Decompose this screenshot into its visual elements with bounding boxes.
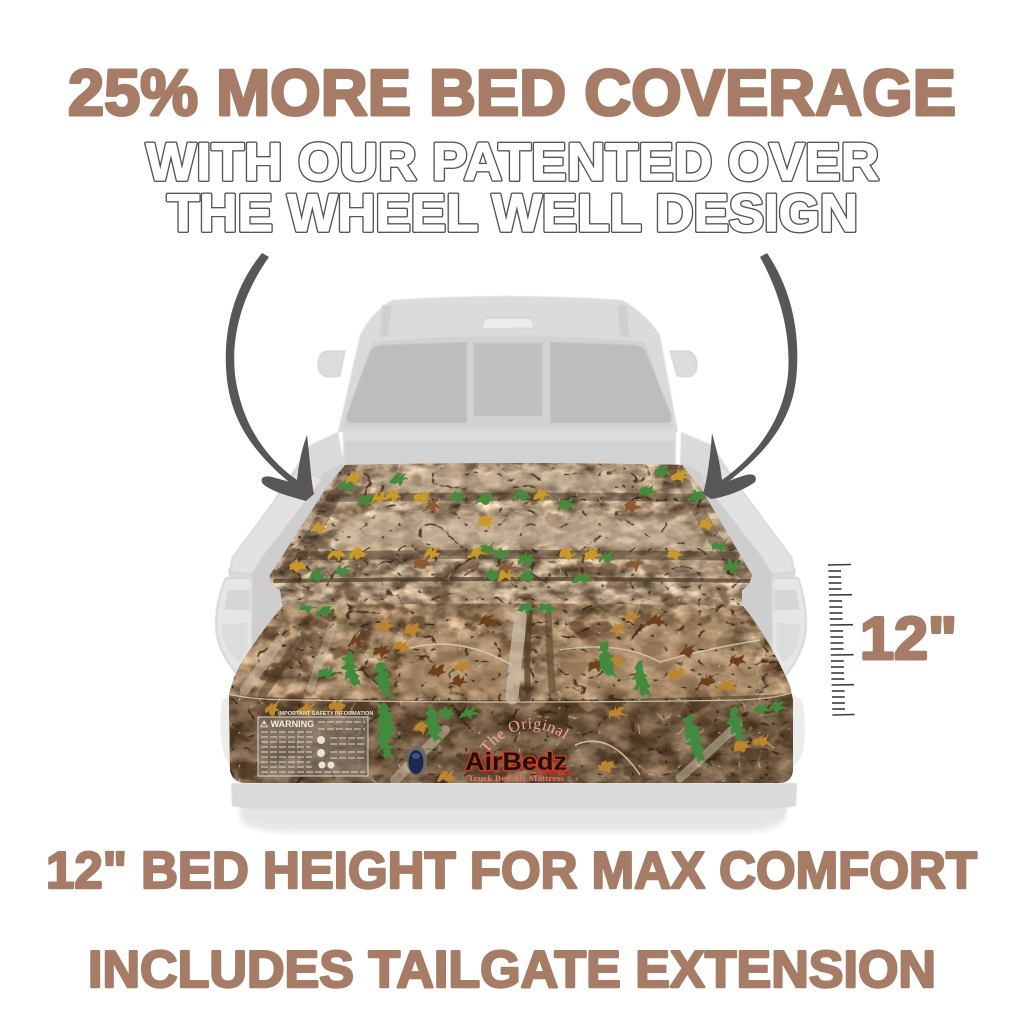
tree trunks <box>245 612 738 780</box>
truck left window <box>347 342 467 423</box>
truck right lower side <box>792 694 805 770</box>
upper leaves <box>288 464 742 585</box>
truck right window <box>550 342 671 423</box>
truck right mirror <box>670 351 697 377</box>
caption: tailgate extension: INCLUDES TAILGATE EXTENSION <box>88 941 936 999</box>
mattress lower section <box>225 600 800 790</box>
subheading: outlined text line one: WITH OUR PATENTED OVER <box>146 133 879 192</box>
mattress <box>229 463 793 783</box>
truck cab <box>338 296 678 432</box>
truck left lower side <box>220 694 232 770</box>
lower leaves <box>263 600 787 784</box>
truck left inner wall <box>252 462 345 650</box>
logo: truck bed air mattress: Truck Bed Air Mattress <box>468 774 564 783</box>
caption: bed height: 12" BED HEIGHT FOR MAX COMFORT <box>46 842 977 900</box>
truck brake light <box>481 318 535 329</box>
truck left bed side <box>228 432 345 660</box>
logo: camo: CAMO <box>536 768 571 777</box>
truck illustration <box>216 296 806 832</box>
truck left mirror <box>318 351 345 377</box>
truck rear bumper <box>231 783 797 809</box>
warning label: IMPORTANT SAFETY INFORMATION <box>278 711 373 717</box>
upper camo texture <box>270 463 752 606</box>
truck left taillight <box>216 578 252 678</box>
truck left rail <box>230 466 322 574</box>
warning label <box>258 711 373 776</box>
truck right bed side <box>680 432 796 660</box>
truck right rail <box>702 466 794 574</box>
light branches <box>410 640 760 775</box>
brand logo <box>464 718 571 783</box>
truck roof pillars <box>380 305 629 338</box>
truck right inner wall <box>680 462 772 650</box>
warning label: ⚠ WARNING <box>260 719 314 729</box>
truck bed wall ribs <box>345 441 674 466</box>
height ruler <box>828 564 855 715</box>
upper dark bands <box>275 468 750 581</box>
truck right taillight <box>772 578 806 678</box>
height label: 12" <box>860 605 957 672</box>
subheading: outlined text line two: THE WHEEL WELL DESIGN <box>167 184 858 243</box>
logo: airbedz: AirBedz <box>465 748 567 776</box>
truck window frame <box>342 336 674 428</box>
truck lower bumper <box>240 809 787 822</box>
right arrow <box>703 253 797 499</box>
seam line <box>229 692 793 702</box>
subheading: outlined text line one: WITH OUR PATENTED OVER <box>146 133 879 192</box>
lower camo texture <box>225 600 800 790</box>
lower block front shading <box>229 694 793 784</box>
upper veins <box>274 463 744 606</box>
lower block tan patches <box>400 620 775 695</box>
mattress upper section <box>270 463 752 606</box>
valve <box>407 746 427 776</box>
subheading: outlined text line two: THE WHEEL WELL DESIGN <box>167 184 858 243</box>
upper pillows <box>330 474 712 546</box>
truck centre window <box>474 343 542 416</box>
heading: 25% more bed coverage: 25% MORE BED COVERAGE <box>68 56 956 129</box>
truck bumper shadow <box>240 806 786 832</box>
truck bed wall <box>343 431 676 467</box>
logo: the original: The Original <box>479 718 569 751</box>
left arrow <box>226 253 314 501</box>
lower veins <box>225 600 800 790</box>
